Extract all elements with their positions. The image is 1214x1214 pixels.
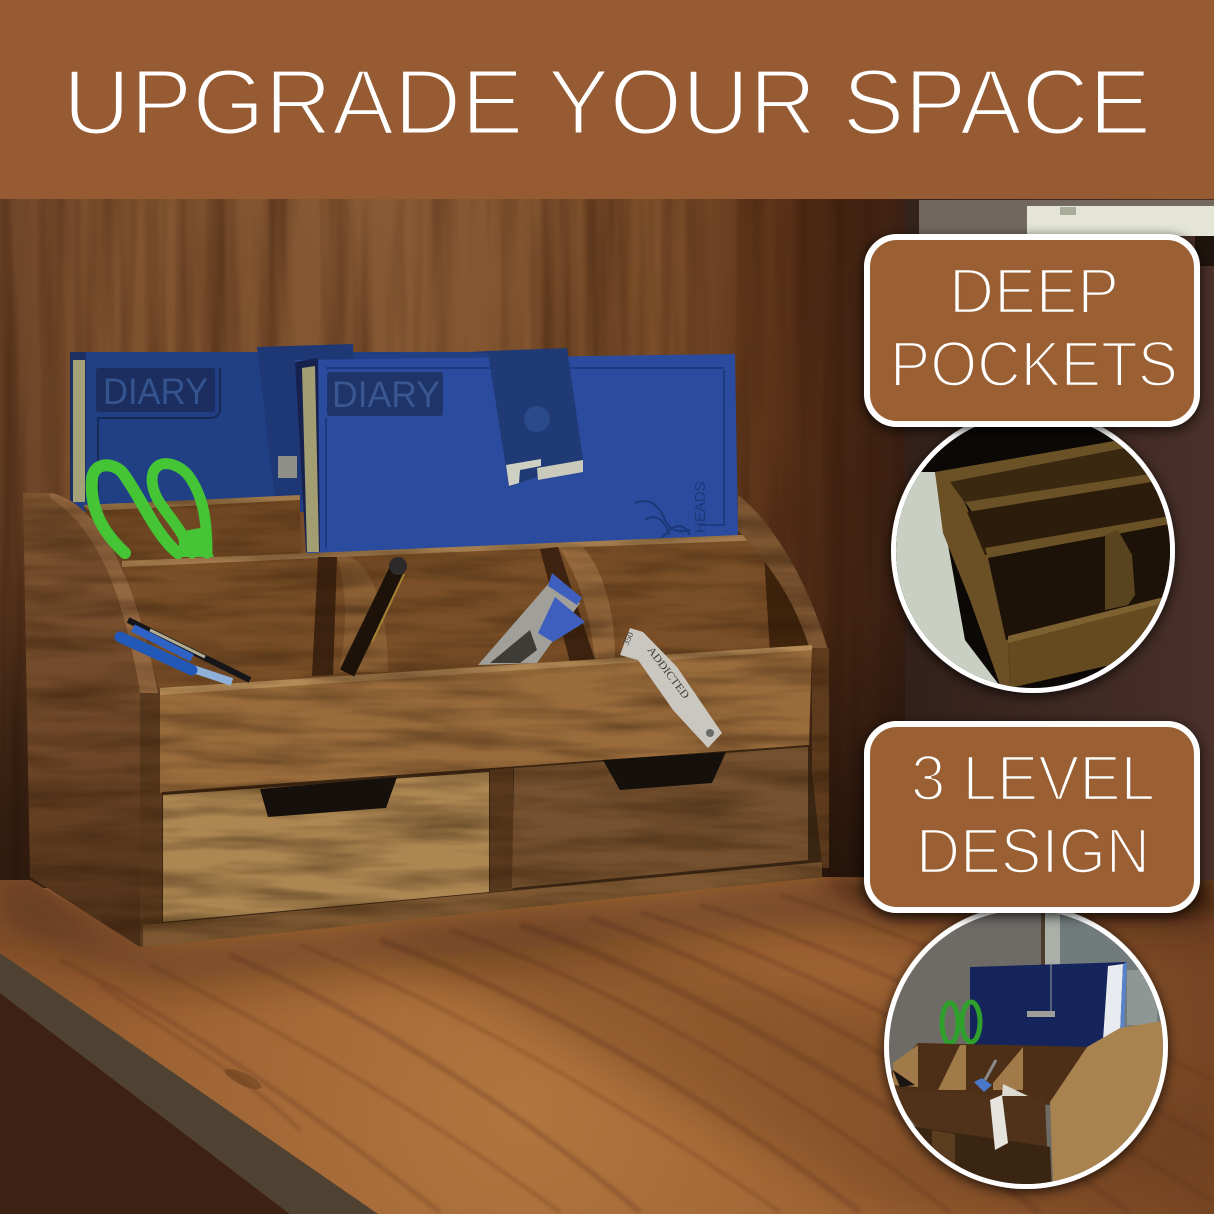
diary embossed logo [635,481,709,540]
desk surface [0,860,1214,1214]
badge: deep pockets: DEEP [949,255,1119,327]
badge: deep pockets: POCKETS [890,328,1178,400]
hang tag [620,628,722,748]
drawer pull notches [260,752,726,817]
blue diary, rear: DIARY [103,371,208,412]
background wall [0,198,905,888]
badge: deep pockets [867,237,1197,424]
stapler [478,573,585,665]
organizer photo [23,344,829,947]
hang tag: 350 [621,630,636,647]
pens [120,557,407,682]
title banner: UPGRADE YOUR SPACE [63,50,1151,154]
badge: 3 level design: 3 LEVEL [911,742,1155,814]
desk edge and lower cabinet [0,953,378,1214]
blue diary, rear [70,344,500,512]
circle photo: 3 level design [884,905,1168,1191]
scissors [92,464,214,557]
blue diary, front: DIARY [332,374,440,415]
badge: 3 level design [867,724,1197,910]
diary strap and clasp [470,348,583,487]
title banner [0,0,1214,199]
diary embossed logo: HEADS [692,481,709,533]
wooden organizer body [23,493,829,947]
hang tag: ADDICTED [645,645,692,701]
badge: 3 level design: DESIGN [916,815,1150,887]
blue diary, front [295,348,738,556]
background window and dark panel [905,198,1214,888]
circle photo: deep pockets [890,408,1176,694]
